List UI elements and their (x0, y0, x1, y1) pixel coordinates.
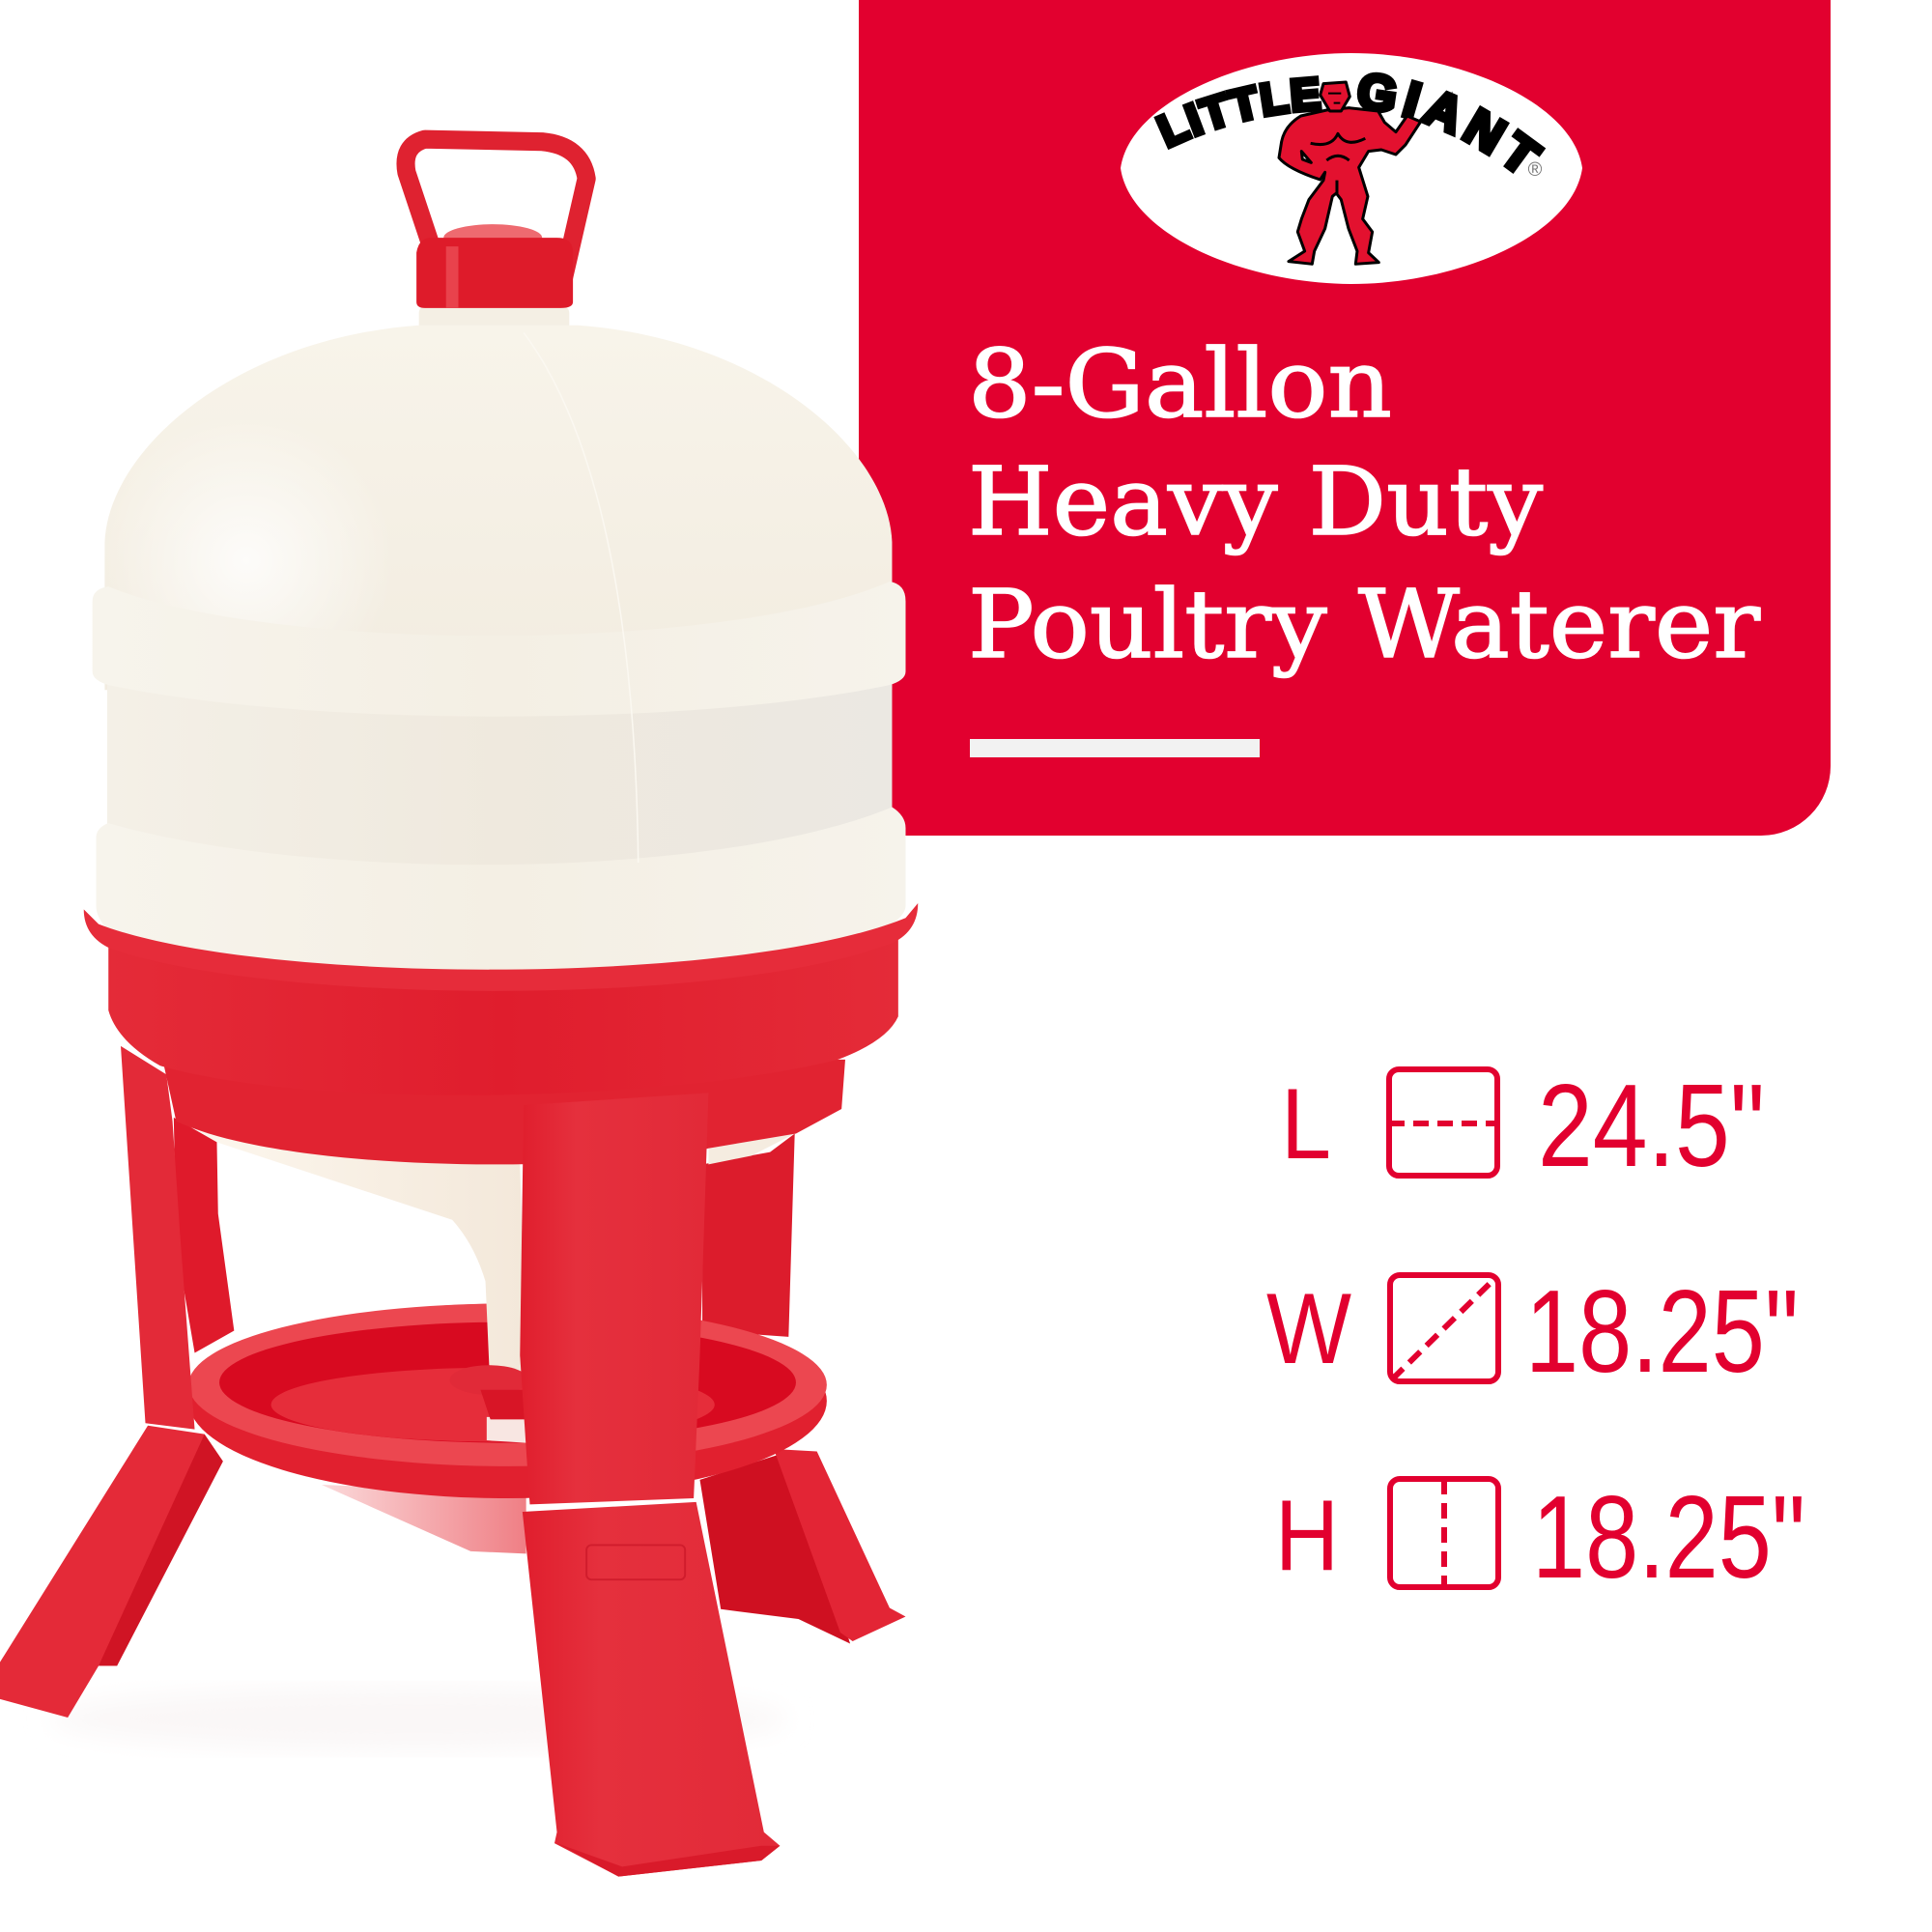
logo: Little Giant oval (1121, 53, 1582, 284)
lower funnel cone (322, 1485, 526, 1553)
row: length: L (1281, 1068, 1331, 1180)
tray ring (188, 1303, 827, 1498)
back right foot (699, 1449, 905, 1644)
ground shadow (49, 1687, 788, 1750)
white reservoir (93, 305, 905, 976)
heading: product name: 8-Gallon (968, 329, 1392, 439)
heading underline bar (970, 739, 1260, 757)
seam (524, 332, 639, 863)
back right column (702, 1133, 795, 1337)
row: width (1266, 1265, 1799, 1397)
trough rim (84, 903, 918, 991)
dome (104, 326, 892, 690)
logo registered mark: ® (1528, 159, 1543, 181)
trough lower ring (162, 1060, 845, 1164)
lower body (107, 666, 892, 899)
logo wordmark: LITTLE: LITTLE (1153, 75, 1322, 151)
row: height: H (1275, 1480, 1339, 1592)
front column (520, 1093, 708, 1504)
row: height (1275, 1471, 1805, 1603)
icon: length box (1389, 1069, 1497, 1176)
cap (416, 224, 573, 308)
front foot (523, 1502, 780, 1877)
row: length: 24.5" (1538, 1060, 1765, 1191)
upper funnel and stem (186, 1123, 795, 1375)
logo wordmark: GIANT: GIANT (1356, 71, 1546, 174)
dimensions block (1266, 1060, 1805, 1603)
upper band (93, 582, 905, 717)
nozzle (450, 1365, 528, 1443)
logo figure: strongman (1279, 82, 1421, 264)
heading: product name (968, 329, 1761, 679)
icon: width box (1390, 1275, 1498, 1381)
lower band (96, 807, 905, 976)
heading: product name: Heavy Duty (968, 447, 1543, 556)
panel: red title panel (859, 0, 1831, 836)
icon: height box (1390, 1479, 1498, 1587)
row: height: 18.25" (1532, 1471, 1805, 1603)
product photo: poultry waterer (0, 139, 918, 1877)
handle (406, 139, 586, 286)
row: length (1281, 1060, 1765, 1191)
left foot (0, 1426, 223, 1718)
row: width: 18.25" (1525, 1265, 1799, 1397)
trough body (108, 930, 898, 1095)
heading: product name: Poultry Waterer (968, 570, 1761, 679)
left column (121, 1046, 234, 1430)
neck (419, 305, 569, 335)
row: width: W (1266, 1273, 1351, 1385)
